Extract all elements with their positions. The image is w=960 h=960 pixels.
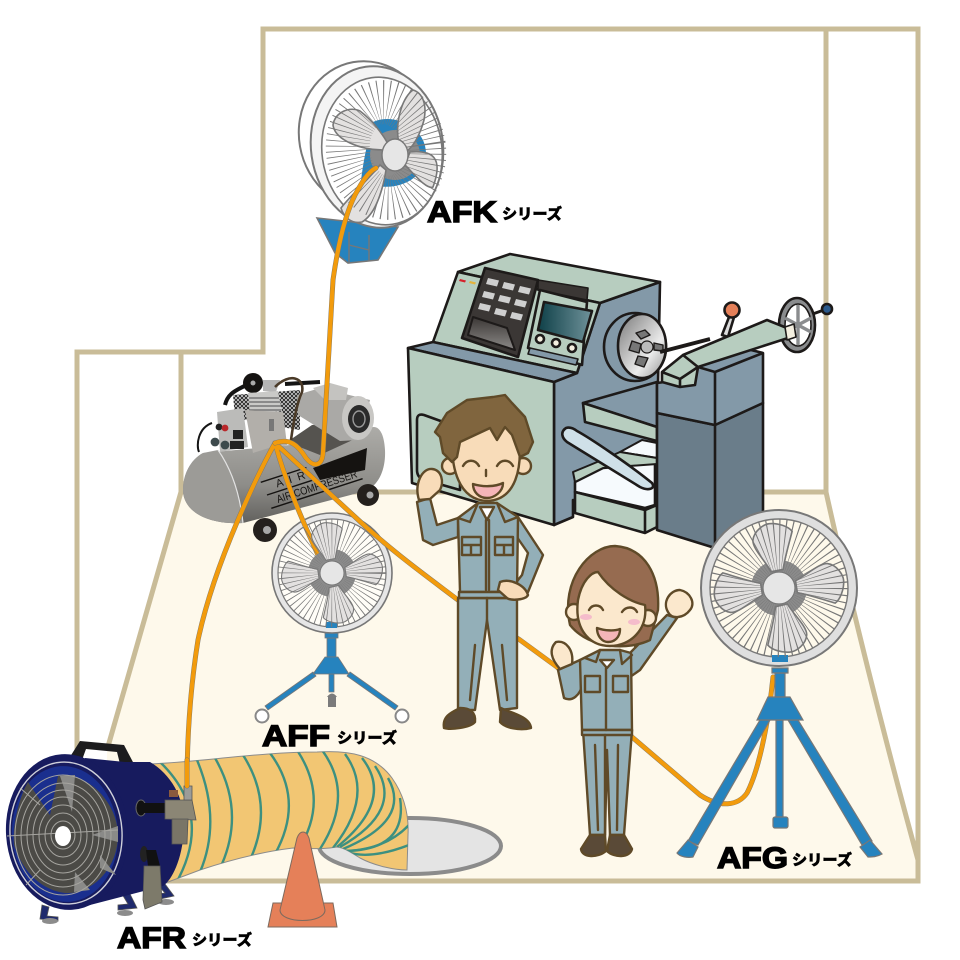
AFG tripod fan	[677, 510, 882, 857]
woman cheeks	[580, 614, 640, 625]
woman ponytail	[635, 625, 653, 662]
AFK supply hose	[275, 168, 376, 464]
label: AFR series	[117, 922, 252, 955]
man shirt	[480, 507, 494, 520]
label: AFK series: シリーズ	[502, 205, 562, 223]
compressor pulley	[243, 373, 280, 393]
lathe spindle rod	[660, 339, 710, 352]
AFG spokes	[736, 545, 822, 631]
compressor tank	[183, 427, 385, 523]
AFK wall fan	[287, 50, 454, 263]
compressor motor	[297, 383, 374, 441]
woman left fist	[552, 642, 572, 669]
label: AFR series: AFR	[117, 922, 186, 955]
AFG ring	[701, 510, 857, 666]
AFF hub	[320, 561, 344, 585]
lathe control panel face	[433, 272, 600, 373]
lathe bed strip	[573, 452, 657, 482]
label: AFR series: シリーズ	[192, 931, 252, 949]
woman face	[577, 572, 645, 646]
woman pockets and zipper	[585, 650, 632, 835]
AFG neck	[772, 655, 788, 662]
woman hair back	[568, 546, 658, 646]
air compressor	[183, 373, 385, 542]
female worker	[552, 546, 692, 856]
lathe hand wheel	[779, 298, 832, 352]
lathe front block	[408, 348, 554, 525]
lathe lever	[722, 302, 740, 337]
man right arm	[510, 517, 543, 592]
lathe dark hood	[538, 280, 588, 300]
manhole	[319, 818, 501, 874]
woman belt	[582, 730, 632, 735]
compressor mesh cage	[233, 390, 300, 430]
woman ears	[566, 604, 656, 626]
AFF caster	[327, 694, 337, 707]
lathe shelf	[583, 382, 657, 427]
woman raised arm	[630, 615, 677, 677]
woman legs	[583, 730, 632, 835]
label: AFF series	[262, 720, 397, 753]
duct body	[150, 752, 408, 885]
lathe shelf face	[583, 403, 657, 441]
AFF ring and face	[272, 513, 392, 633]
room floor	[107, 492, 918, 881]
lathe screen	[538, 302, 592, 342]
AFK blue motor	[360, 119, 426, 220]
woman shirt	[600, 660, 614, 668]
AFR grille	[7, 775, 118, 895]
compressor copper pipe	[275, 378, 302, 440]
compressor deck	[287, 420, 372, 455]
compressor cylinder fins	[248, 391, 282, 414]
AFG hub	[763, 572, 795, 604]
AFR handle	[68, 741, 134, 764]
AFR legs	[40, 872, 174, 921]
compressor black panel	[313, 448, 367, 480]
compressor hubcaps	[263, 492, 374, 534]
AFK back ring	[287, 50, 445, 220]
AFR hub	[55, 826, 71, 846]
AFF back hub	[308, 549, 356, 597]
man mouth	[473, 483, 503, 498]
man nose	[485, 470, 487, 476]
label: AFK series: AFK	[427, 196, 497, 229]
AFK blades	[333, 90, 437, 222]
label: AFG series	[717, 842, 852, 875]
lathe tool blade	[562, 428, 653, 489]
lathe slot	[528, 348, 578, 365]
lathe chuck	[604, 313, 666, 381]
lathe amber lamp	[469, 281, 476, 284]
label: AFF series: シリーズ	[337, 729, 397, 747]
compressor wheels	[253, 484, 379, 542]
AFR air filter assembly	[136, 786, 196, 844]
AFF floor fan front	[280, 521, 384, 625]
compressor label text: AIR	[274, 468, 313, 490]
AFR lower silencer	[140, 846, 162, 909]
room walls outline	[77, 29, 918, 881]
AFF spokes	[298, 539, 366, 607]
AFF blades	[280, 521, 384, 625]
man smile eyes	[463, 461, 513, 466]
AFR front rim	[1, 750, 133, 914]
label: AFG series: シリーズ	[792, 851, 852, 869]
compressor label text	[261, 452, 363, 509]
woman torso	[580, 650, 632, 730]
AFR blue backing	[7, 762, 123, 906]
woman eyes	[589, 606, 637, 612]
AFR blower fan	[1, 741, 196, 924]
flexible duct	[150, 750, 409, 885]
man ears	[442, 458, 531, 474]
AFR feet	[42, 899, 174, 924]
traffic cone	[268, 832, 337, 927]
label: AFG series: AFG	[717, 842, 788, 875]
compressor tank cap	[183, 450, 243, 523]
AFG blades	[713, 521, 845, 655]
duct ribs	[160, 750, 409, 885]
lathe keys	[478, 278, 531, 320]
lathe tailstock arm	[662, 320, 788, 387]
AFK front ring	[300, 58, 454, 236]
compressor rear hoses	[225, 382, 320, 405]
lathe buttons	[536, 335, 576, 352]
woman shoes	[581, 835, 632, 856]
lathe top face	[458, 254, 660, 303]
male worker	[417, 395, 543, 729]
lathe quill	[785, 324, 796, 340]
compressor control box	[198, 408, 248, 452]
AFK blue bracket	[317, 218, 398, 263]
lathe lower block	[575, 492, 657, 533]
man face	[452, 415, 520, 501]
AFF floor fan back	[256, 513, 408, 722]
lathe blue body	[554, 282, 660, 525]
lathe machine	[408, 254, 832, 548]
AFR dark blades	[14, 776, 118, 893]
lathe screen panel	[528, 290, 587, 365]
woman mouth	[597, 628, 620, 642]
label: AFF series: AFF	[262, 720, 330, 753]
lathe lower white	[575, 463, 655, 508]
man hair	[435, 395, 533, 462]
lathe column lower	[657, 403, 763, 548]
AFR grey blade tips	[60, 775, 118, 892]
woman left arm	[558, 660, 583, 699]
lathe side window	[417, 415, 460, 490]
man shoes	[444, 708, 531, 729]
woman raised fist	[666, 590, 692, 617]
man zipper and pockets	[458, 503, 518, 700]
compressor head block	[245, 410, 287, 453]
man hand	[498, 581, 528, 600]
man fist	[417, 469, 442, 500]
man left arm	[417, 498, 458, 545]
lathe indicator lamps	[459, 279, 466, 282]
man torso	[458, 503, 518, 592]
orange air hoses	[187, 443, 773, 804]
AFK spokes	[342, 97, 430, 203]
AFF wheels	[256, 710, 408, 722]
AFF stand	[265, 633, 398, 710]
lathe shelf band	[408, 342, 577, 382]
man legs	[458, 598, 517, 710]
AFG back hub	[751, 560, 807, 616]
man belt	[459, 592, 517, 598]
AFK hub	[382, 139, 408, 171]
lathe column top	[657, 348, 763, 425]
filter hose end	[184, 760, 190, 786]
label: AFK series	[427, 196, 562, 229]
lathe keypad	[462, 268, 538, 357]
AFG tripod	[677, 668, 882, 857]
AFR drum	[85, 758, 184, 905]
lathe white upper patch	[620, 440, 657, 458]
AFF neck	[326, 622, 337, 628]
AFR rim ring	[5, 758, 127, 908]
compressor label text: AIR COMPRESSER	[275, 468, 359, 506]
